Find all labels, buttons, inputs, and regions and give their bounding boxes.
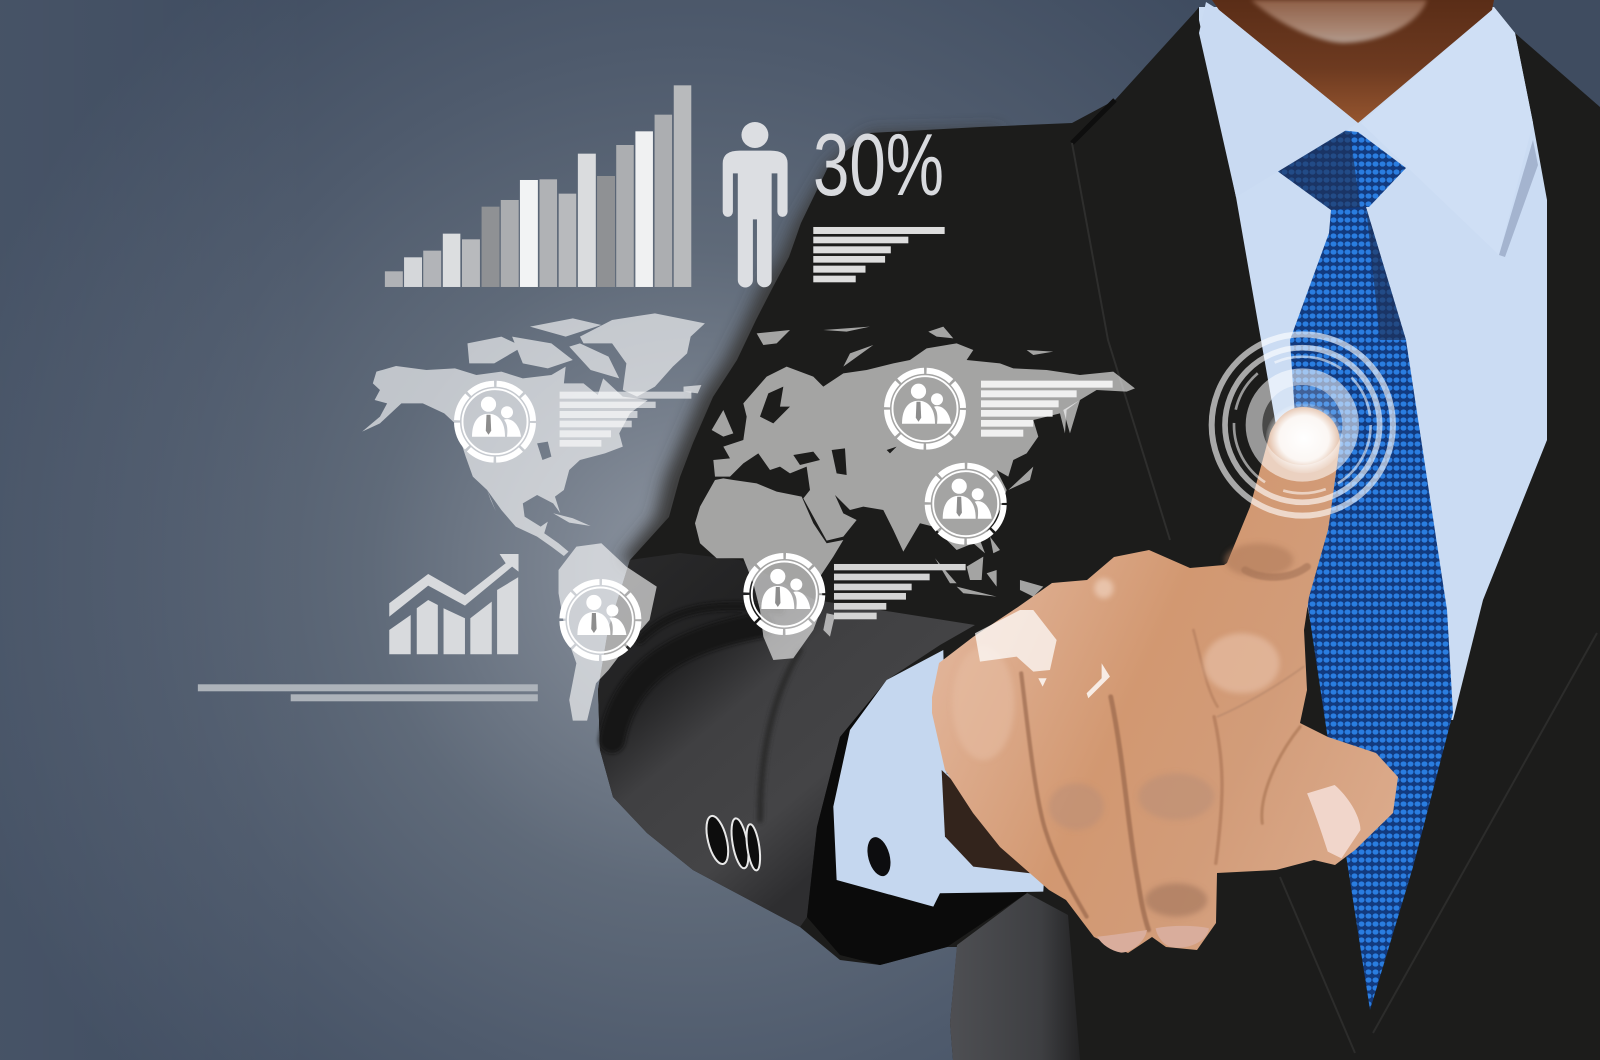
second ring	[1225, 348, 1380, 502]
shirt cuff	[833, 650, 1047, 907]
chin	[1251, 0, 1427, 43]
inner disc	[1262, 385, 1342, 465]
lower torso	[950, 893, 1080, 1060]
necktie	[1276, 130, 1453, 1010]
South America	[559, 543, 657, 721]
badge: South America	[562, 582, 638, 658]
hand	[932, 407, 1398, 953]
icon: growth chart with arrow	[389, 554, 519, 654]
Africa	[695, 478, 843, 660]
outer ring	[1212, 334, 1393, 516]
Eurasia	[713, 343, 1135, 553]
lapel notch	[1072, 100, 1115, 143]
Australia	[975, 610, 1057, 672]
map bars: Africa	[834, 564, 966, 619]
Iceland	[684, 385, 701, 393]
Iceland	[757, 330, 790, 345]
percentage label: 30%	[813, 115, 944, 214]
suit body	[598, 7, 1600, 1060]
badge: Russia	[887, 371, 963, 447]
world map	[362, 313, 1135, 721]
man in suit	[598, 0, 1600, 1060]
cuff button	[863, 835, 894, 879]
finger shading	[1021, 567, 1307, 930]
knuckle highlights	[952, 543, 1293, 917]
badge: Africa	[746, 556, 822, 632]
Tasmania	[1038, 678, 1047, 687]
segmented ring	[1234, 357, 1371, 493]
map bars: Asia	[981, 381, 1113, 437]
fingertip glow	[1266, 403, 1342, 473]
wrist shadow	[942, 770, 1030, 873]
Madagascar	[823, 613, 835, 637]
collar shadow	[1499, 140, 1538, 257]
Greenland	[580, 313, 705, 397]
map: Americas	[362, 313, 705, 721]
neck	[1212, 0, 1494, 123]
map bars: North America	[560, 392, 691, 447]
Caribbean	[553, 513, 591, 526]
map: Eurasia and Africa	[695, 327, 1135, 698]
sleeve	[598, 553, 975, 927]
Arctic islands	[467, 318, 619, 378]
shirt	[1199, 7, 1547, 720]
sleeve buttons	[702, 814, 763, 871]
Sakhalin and Japan	[1008, 350, 1080, 490]
touch target rings	[1212, 334, 1393, 516]
icon: person	[723, 122, 788, 288]
fingernails	[1097, 785, 1360, 953]
North America	[362, 366, 648, 556]
inner band	[1254, 377, 1351, 473]
upper arm blurred edge	[620, 130, 1000, 600]
sleeve folds	[612, 606, 800, 820]
sleeve inner dark	[807, 680, 1027, 965]
New Zealand	[1087, 663, 1110, 698]
collar left	[1199, 2, 1358, 197]
Arctic Russia islands	[823, 327, 953, 367]
bar chart	[385, 85, 691, 287]
footer lines	[198, 684, 538, 701]
UK	[712, 410, 733, 437]
collar right	[1361, 7, 1533, 255]
lapel edges	[1280, 633, 1597, 1053]
tie knot shading	[1276, 130, 1406, 340]
badge: North America	[457, 384, 533, 460]
bars beside percentage	[813, 227, 945, 282]
badge: East Asia	[928, 466, 1004, 542]
Southeast Asia islands	[935, 537, 1043, 597]
